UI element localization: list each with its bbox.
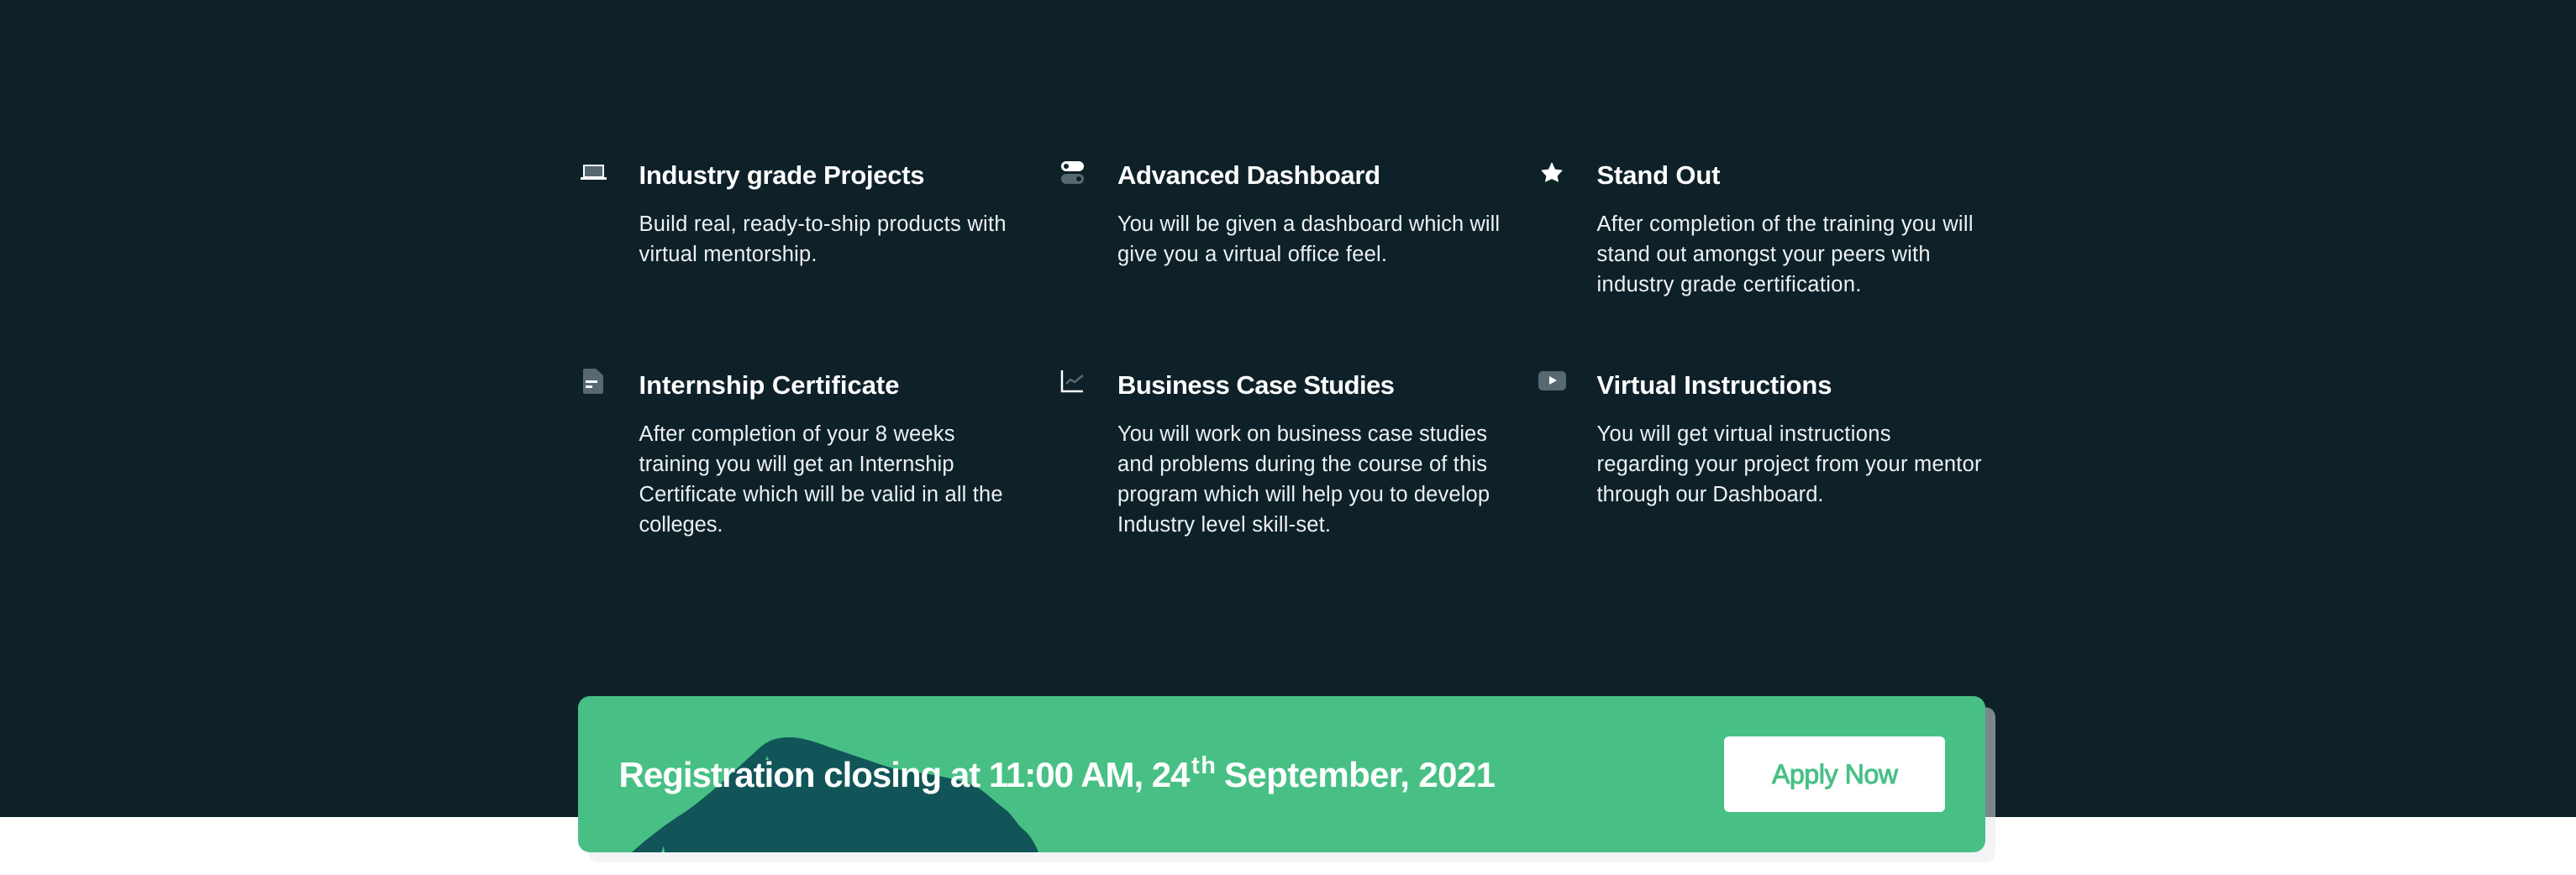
description: stand out amongst your peers with bbox=[1596, 243, 1931, 266]
description: industry grade certification. bbox=[1596, 273, 1862, 296]
description bbox=[1117, 212, 1500, 266]
description: You will work on business case studies bbox=[1117, 422, 1487, 446]
registration headline: Registration closing at 11:00 AM, 24 bbox=[618, 755, 1191, 794]
description: You will be given a dashboard which will bbox=[1117, 212, 1500, 236]
heading: Stand Out bbox=[1596, 160, 1721, 190]
heading: Advanced Dashboard bbox=[1117, 160, 1380, 190]
decorative blob bbox=[632, 737, 1038, 852]
apply now button bbox=[1724, 736, 1945, 812]
registration banner bbox=[578, 696, 1995, 862]
icon: laptop bbox=[581, 165, 607, 180]
description: virtual mentorship. bbox=[639, 243, 817, 266]
feature: Virtual Instructions bbox=[1538, 370, 1982, 506]
heading: Industry grade Projects bbox=[639, 160, 924, 190]
banner card bbox=[578, 696, 1985, 852]
icon: document bbox=[583, 369, 603, 394]
description: colleges. bbox=[639, 513, 723, 537]
description: Industry level skill-set. bbox=[1117, 513, 1331, 537]
registration headline: th bbox=[1191, 752, 1216, 779]
feature: Advanced Dashboard bbox=[1061, 160, 1500, 266]
icon: star bbox=[1542, 163, 1562, 181]
description: give you a virtual office feel. bbox=[1117, 243, 1387, 266]
description: regarding your project from your mentor bbox=[1596, 453, 1982, 476]
description: You will get virtual instructions bbox=[1596, 422, 1890, 446]
registration headline: September, 2021 bbox=[1224, 755, 1496, 794]
description: Build real, ready-to-ship products with bbox=[639, 212, 1007, 236]
description: program which will help you to develop bbox=[1117, 483, 1490, 506]
description: training you will get an Internship bbox=[639, 453, 954, 476]
banner offset shadow bbox=[588, 707, 1995, 862]
feature: Internship Certificate bbox=[583, 369, 1003, 537]
feature: Stand Out bbox=[1542, 160, 1973, 296]
description: Certificate which will be valid in all the bbox=[639, 483, 1003, 506]
icon: video player bbox=[1538, 371, 1566, 390]
heading: Internship Certificate bbox=[639, 370, 899, 400]
description: and problems during the course of this bbox=[1117, 453, 1487, 476]
description bbox=[639, 212, 1007, 266]
heading: Business Case Studies bbox=[1117, 370, 1395, 400]
apply now button: Apply Now bbox=[1772, 759, 1899, 789]
description bbox=[639, 422, 1003, 537]
feature: Industry grade Projects bbox=[581, 160, 1007, 266]
icon: toggles bbox=[1061, 161, 1084, 184]
heading: Virtual Instructions bbox=[1596, 370, 1832, 400]
icon: line chart bbox=[1062, 370, 1083, 391]
feature: Business Case Studies bbox=[1062, 370, 1490, 537]
description: through our Dashboard. bbox=[1596, 483, 1823, 506]
description: After completion of the training you will bbox=[1596, 212, 1973, 236]
description bbox=[1117, 422, 1490, 537]
description bbox=[1596, 422, 1982, 506]
description bbox=[1596, 212, 1973, 296]
description: After completion of your 8 weeks bbox=[639, 422, 954, 446]
registration headline bbox=[618, 752, 1496, 794]
